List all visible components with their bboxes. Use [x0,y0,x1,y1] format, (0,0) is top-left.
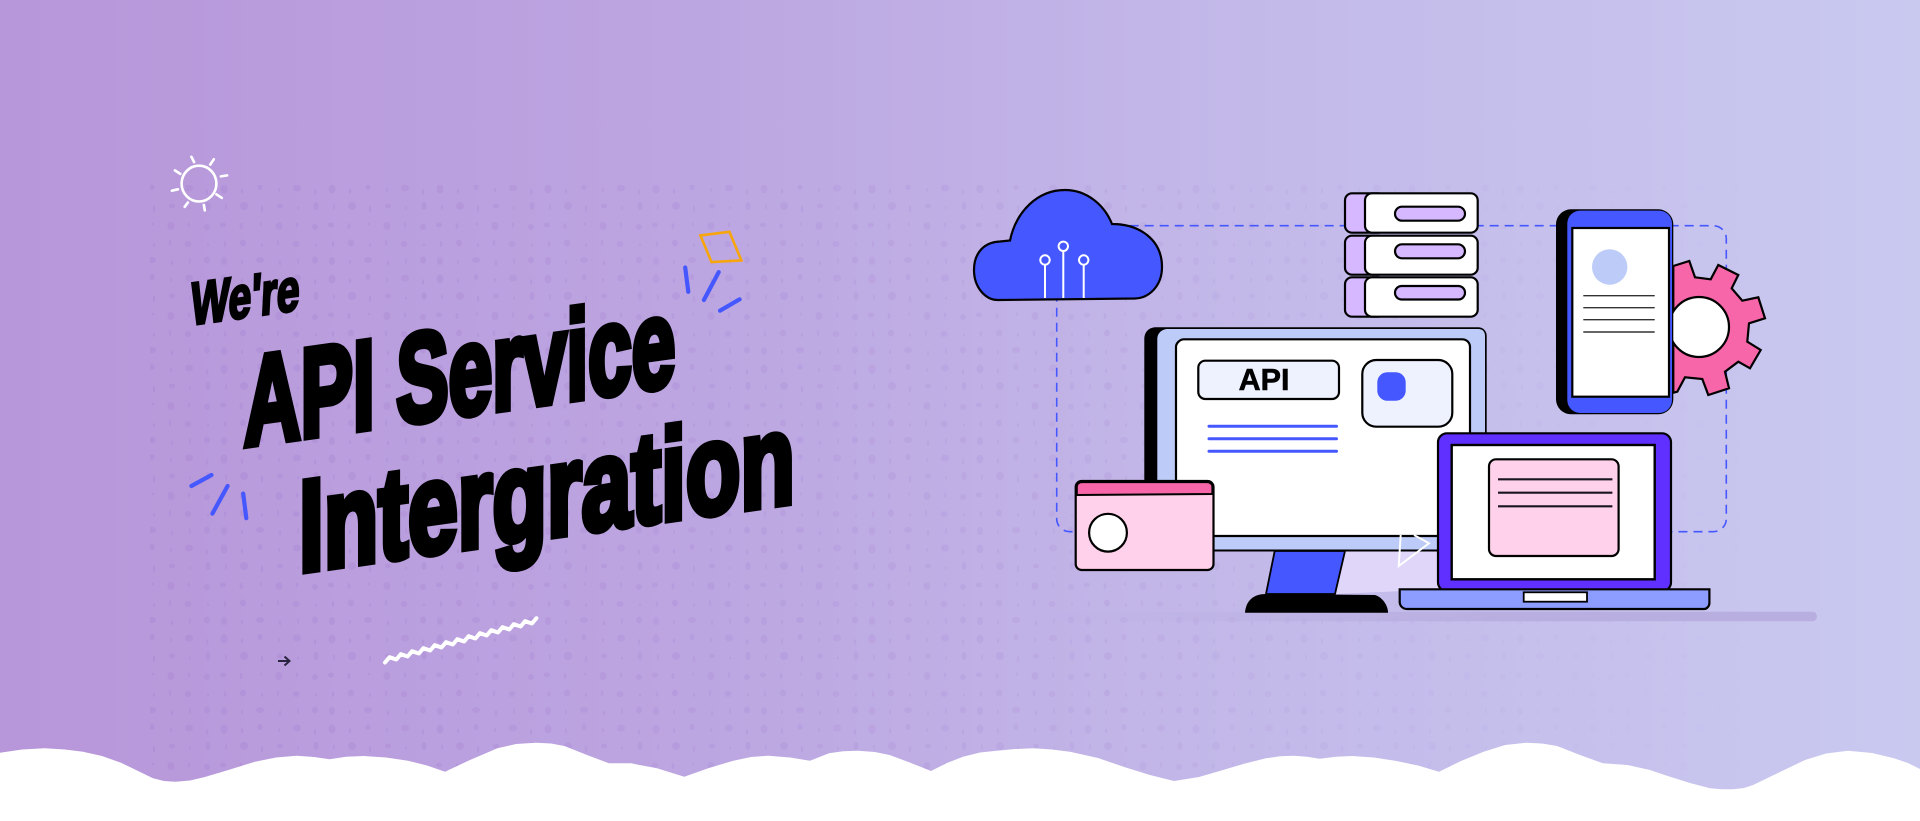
monitor base [1245,594,1388,613]
icon: phone [1556,209,1673,414]
laptop lid [1438,433,1671,591]
monitor [1144,327,1487,613]
pink card [1076,481,1214,570]
decoration: white squiggle [385,618,536,662]
monitor screen [1176,339,1470,536]
laptop document card [1489,459,1619,556]
API label box: API [1239,363,1289,397]
heading: API Service: API Service [244,272,675,473]
laptop base [1400,589,1709,609]
connector: dashed frame [1057,226,1726,532]
icon: play triangle outline [1399,535,1429,566]
icon: small arrow [278,656,290,666]
white cloud wave footer [0,743,1920,821]
heading: We're: We're [189,255,302,338]
icon: gear [1669,261,1765,395]
image card [1362,360,1452,427]
icon: sun [172,157,227,210]
heading: Intergration: Intergration [299,385,795,599]
decoration: blue sparks top [685,268,740,311]
laptop [1400,433,1709,609]
translucent panel behind stand [1336,551,1440,594]
monitor frame [1144,327,1487,552]
laptop screen [1452,445,1655,579]
blue text lines [1209,426,1336,451]
monitor stand [1266,551,1345,594]
API label box [1198,361,1339,399]
icon: cloud [974,190,1162,300]
icon: server stack [1345,193,1478,317]
decoration: blue sparks bottom [191,475,246,518]
decoration: orange rhombus [700,232,741,262]
desk shadow [1030,612,1817,621]
